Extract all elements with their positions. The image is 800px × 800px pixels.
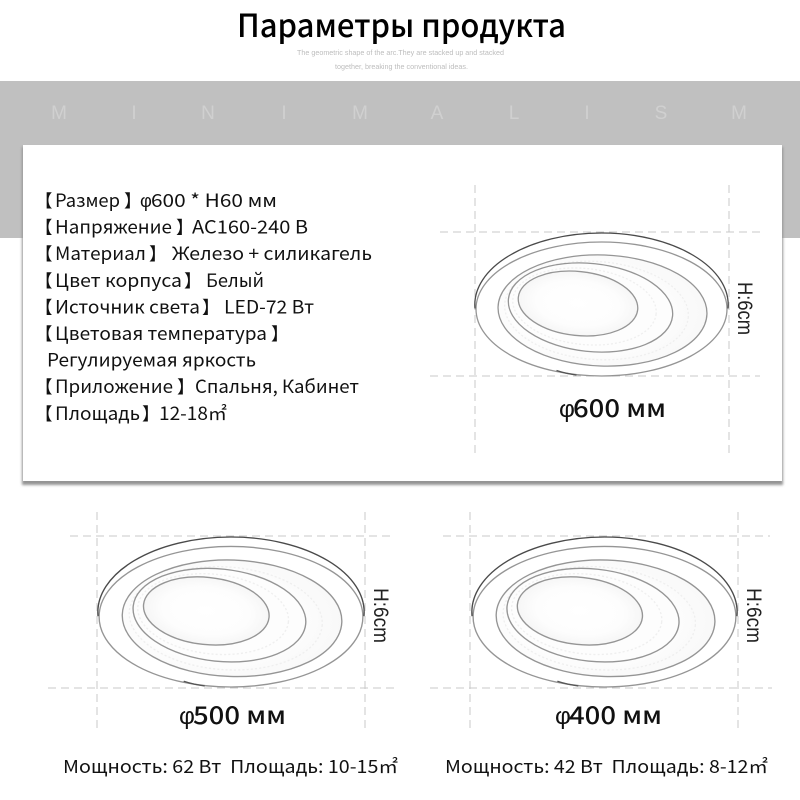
specification list: Материал <box>55 240 146 266</box>
specification list <box>35 187 372 426</box>
specification list: 【 <box>35 294 52 319</box>
diameter label: 500: 500 мм <box>193 697 286 732</box>
diameter label: 400: 400 мм <box>569 697 662 732</box>
band lettering: MINIMALISM: I <box>131 103 137 124</box>
height label: 400 lamp: H:6cm <box>742 588 765 643</box>
specification list: 【 <box>35 401 52 426</box>
subtitle: english caption: The geometric shape of the arc.They are stacked up and stacked <box>297 48 504 57</box>
specification list: Площадь <box>55 400 140 426</box>
grey band <box>0 81 800 238</box>
specification list: 】 <box>149 241 166 266</box>
band lettering: MINIMALISM: I <box>281 103 287 124</box>
specification list: 【 <box>35 374 52 399</box>
specification list: 【 <box>35 321 52 346</box>
specification list: Приложение <box>55 373 173 399</box>
diameter label: 500: φ <box>179 703 195 730</box>
specification list: Железо + силикагель <box>172 240 372 266</box>
band lettering: MINIMALISM: I <box>584 103 590 124</box>
specification list: 600 * H60 мм <box>151 187 277 213</box>
specification list: 【 <box>35 188 52 213</box>
subtitle: english caption <box>297 48 504 71</box>
specification list: 】 <box>177 374 194 399</box>
band lettering: MINIMALISM: L <box>509 103 519 124</box>
subtitle: english caption: together, breaking the conventional ideas. <box>335 62 468 71</box>
height label: 500 lamp: H:6cm <box>369 588 392 643</box>
diameter label: 600: 600 мм <box>573 390 666 425</box>
specification list: 】 <box>202 294 220 319</box>
specification list: 】 <box>142 401 160 426</box>
title: Параметры продукта <box>237 1 566 47</box>
specification list: 】 <box>184 268 202 293</box>
specification list: φ <box>140 190 152 211</box>
band lettering: MINIMALISM <box>51 103 747 124</box>
band lettering: MINIMALISM: A <box>431 103 444 124</box>
specification list: Спальня, Кабинет <box>195 373 359 399</box>
specification list: Цвет корпуса <box>55 267 182 293</box>
guide lines: 400 lamp <box>430 512 772 733</box>
panel: white specification card <box>23 145 782 481</box>
power and area: 500 lamp: Мощность: 62 Вт Площадь: 10-15㎡ <box>63 753 398 779</box>
specification list: 】 <box>176 215 194 240</box>
specification list: Напряжение <box>55 214 172 240</box>
icon: ceiling lamp 600 <box>475 233 728 376</box>
icon: ceiling lamp 500 <box>98 537 364 687</box>
specification list: 【 <box>35 215 52 240</box>
band lettering: MINIMALISM: M <box>51 103 67 124</box>
guide lines: 600 lamp <box>430 185 760 455</box>
specification list: Регулируемая яркость <box>47 347 256 373</box>
band lettering: MINIMALISM: M <box>731 103 747 124</box>
specification list: 】 <box>124 188 142 213</box>
icon: ceiling lamp 400 <box>472 537 737 687</box>
power and area: 400 lamp: Мощность: 42 Вт Площадь: 8-12㎡ <box>445 753 768 779</box>
band lettering: MINIMALISM: N <box>201 103 215 124</box>
diameter label: 600: φ <box>559 396 575 423</box>
specification list: 【 <box>35 241 52 266</box>
band lettering: MINIMALISM: M <box>352 103 368 124</box>
specification list: AC160-240 В <box>192 214 308 240</box>
specification list: Цветовая температура <box>55 320 267 346</box>
specification list: 】 <box>271 321 288 346</box>
specification list: LED-72 Вт <box>224 293 314 319</box>
specification list: Размер <box>55 187 120 213</box>
specification list: Источник света <box>55 293 200 319</box>
card shadow <box>22 147 783 485</box>
specification list: 【 <box>35 268 52 293</box>
height label: 600 lamp: H:6cm <box>733 282 756 335</box>
specification list: 12-18㎡ <box>159 400 227 426</box>
diameter label: 400: φ <box>555 703 571 730</box>
specification list: Белый <box>206 267 264 293</box>
guide lines: 500 lamp <box>48 512 397 733</box>
band lettering: MINIMALISM: S <box>655 103 667 124</box>
